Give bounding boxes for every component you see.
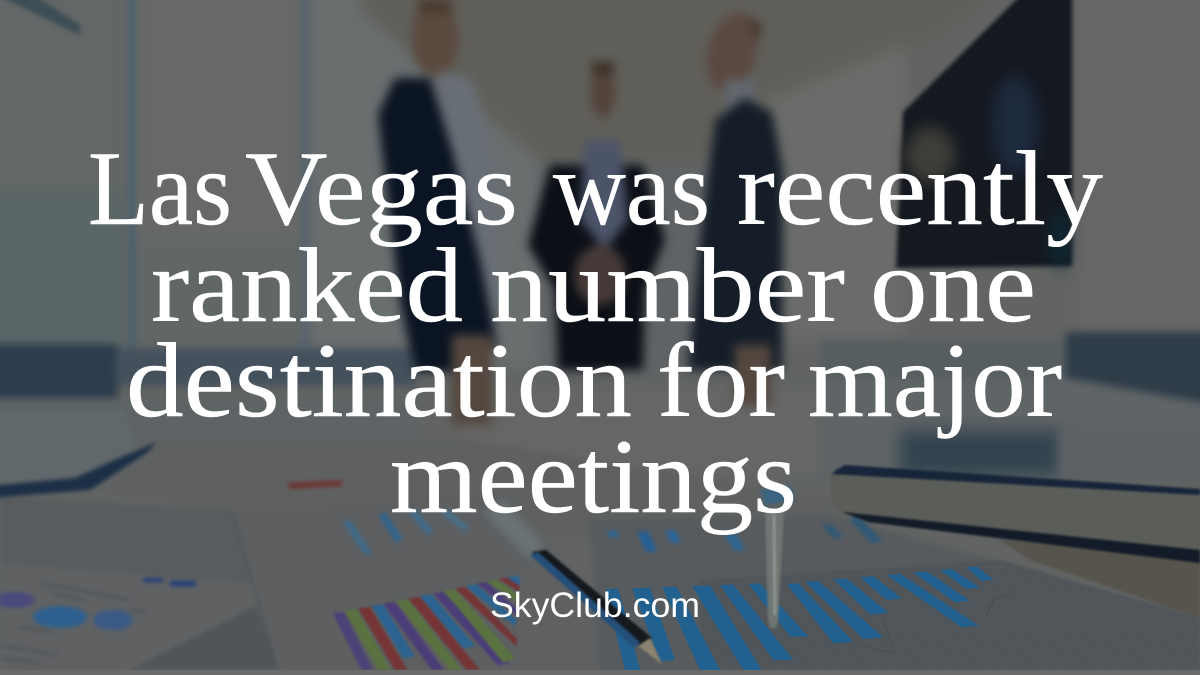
red pen on table (287, 480, 342, 489)
left chart paper (0, 563, 255, 670)
headline: meetings (390, 418, 797, 535)
headline: for (657, 322, 785, 439)
table and papers (0, 442, 344, 670)
headline: Las (88, 130, 232, 247)
pie charts (0, 576, 198, 632)
white paper with blue chart (518, 578, 522, 586)
headline: was (553, 130, 710, 247)
headline (88, 130, 1103, 535)
upper left paper (0, 497, 252, 583)
blurred office room with three standing people (0, 0, 1200, 428)
headline: major (808, 322, 1062, 439)
headline: Vegas (245, 130, 518, 247)
right paper with chart grid (593, 518, 983, 654)
headline: recently (737, 130, 1103, 247)
faint small blue bars in the background (343, 485, 882, 555)
blue notebook behind the book (900, 430, 1060, 476)
headline: number (490, 227, 845, 344)
multicolor bar chart (333, 576, 522, 670)
metal pencil (765, 510, 784, 628)
ballpoint pen (483, 500, 662, 664)
headline: one (870, 227, 1036, 344)
person center (528, 62, 665, 370)
headline: destination (126, 322, 632, 439)
source label: SkyClub.com (490, 586, 700, 625)
person right (688, 7, 783, 405)
headline: ranked (151, 227, 463, 344)
notepad at upper left (0, 410, 135, 485)
dark blue band on right wall (821, 328, 1200, 407)
walls and ceiling (314, 0, 974, 366)
center paper (232, 490, 660, 670)
table corner beyond paper (1000, 540, 1200, 618)
dark blue band on left wall (0, 340, 418, 403)
book on the right (830, 430, 1200, 563)
person left (378, 0, 500, 425)
blue bar chart (605, 566, 1013, 670)
notepad dark spine (0, 442, 157, 498)
dark wall screen (896, 0, 1072, 270)
corner shadow triangle (127, 605, 277, 670)
bottom gray strip (0, 670, 1200, 675)
table top (100, 440, 830, 560)
